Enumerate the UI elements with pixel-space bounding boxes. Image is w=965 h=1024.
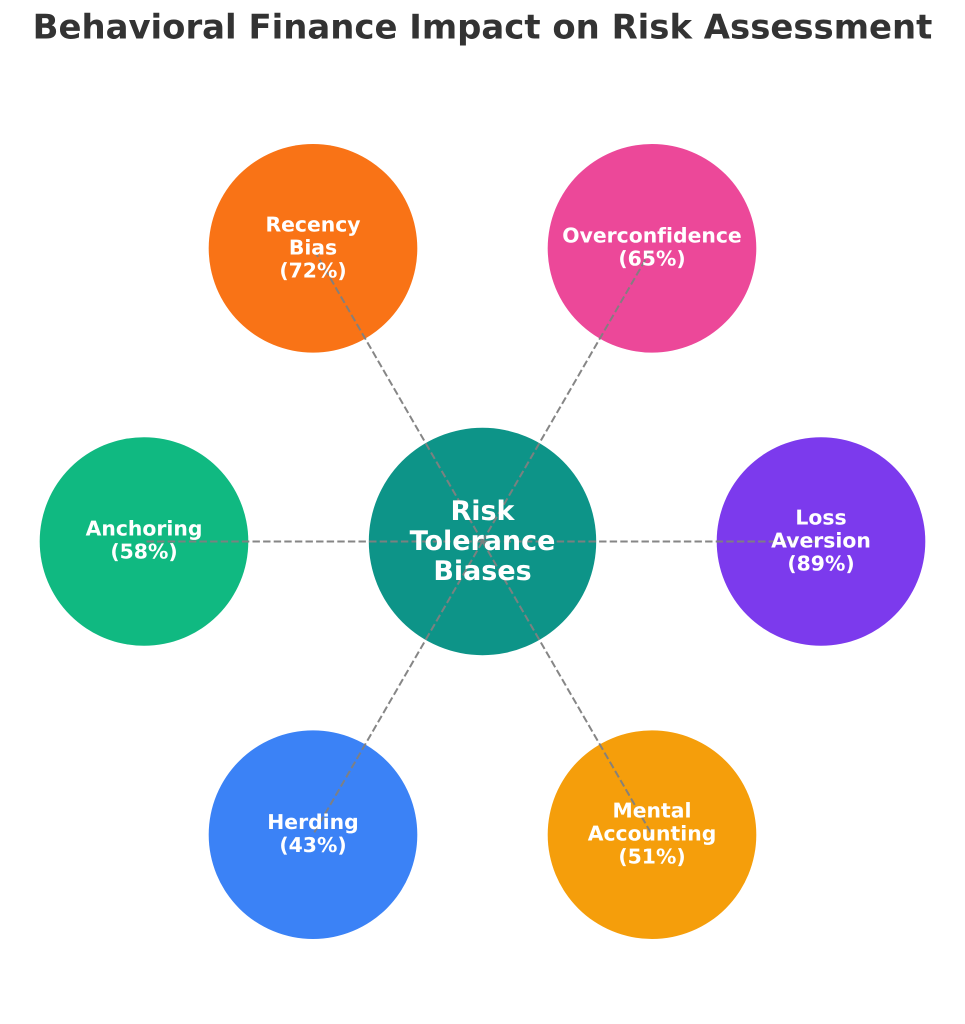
label: center: Biases bbox=[433, 556, 532, 587]
label: Herding: Herding bbox=[267, 810, 359, 834]
label: Mental Accounting: Accounting bbox=[588, 822, 716, 846]
label: Anchoring: Anchoring bbox=[86, 517, 202, 541]
label: center: Risk bbox=[451, 496, 516, 527]
label: Overconfidence: Overconfidence bbox=[562, 224, 742, 248]
label: Overconfidence bbox=[562, 224, 742, 270]
label: Mental Accounting bbox=[588, 798, 716, 868]
label: Overconfidence: (65%) bbox=[618, 246, 686, 270]
label: Recency Bias: (72%) bbox=[279, 258, 347, 282]
label: Herding bbox=[267, 810, 359, 857]
node: Overconfidence bbox=[548, 144, 756, 353]
node: Anchoring bbox=[40, 437, 248, 646]
node: Recency Bias bbox=[209, 144, 417, 353]
label: Mental Accounting: Mental bbox=[613, 798, 691, 822]
label: Recency Bias: Recency bbox=[265, 212, 361, 236]
label: Recency Bias: Bias bbox=[289, 235, 337, 259]
label: Anchoring bbox=[86, 517, 202, 564]
label: Loss Aversion: Aversion bbox=[771, 528, 871, 552]
label: Mental Accounting: (51%) bbox=[618, 844, 686, 868]
label: Recency Bias bbox=[265, 212, 361, 282]
node: Loss Aversion bbox=[717, 437, 925, 646]
label: Anchoring: (58%) bbox=[110, 540, 178, 564]
label: Loss Aversion bbox=[771, 506, 871, 576]
label: center: Tolerance bbox=[410, 526, 555, 557]
node: Mental Accounting bbox=[548, 730, 756, 939]
label: Loss Aversion: Loss bbox=[795, 506, 847, 530]
connector lines bbox=[144, 248, 821, 835]
label: Herding: (43%) bbox=[279, 833, 347, 857]
center node bbox=[369, 428, 596, 655]
node: Herding bbox=[209, 730, 417, 939]
label: center bbox=[410, 496, 555, 587]
title: Behavioral Finance Impact on Risk Assessment bbox=[33, 7, 932, 46]
label: Loss Aversion: (89%) bbox=[787, 552, 855, 576]
